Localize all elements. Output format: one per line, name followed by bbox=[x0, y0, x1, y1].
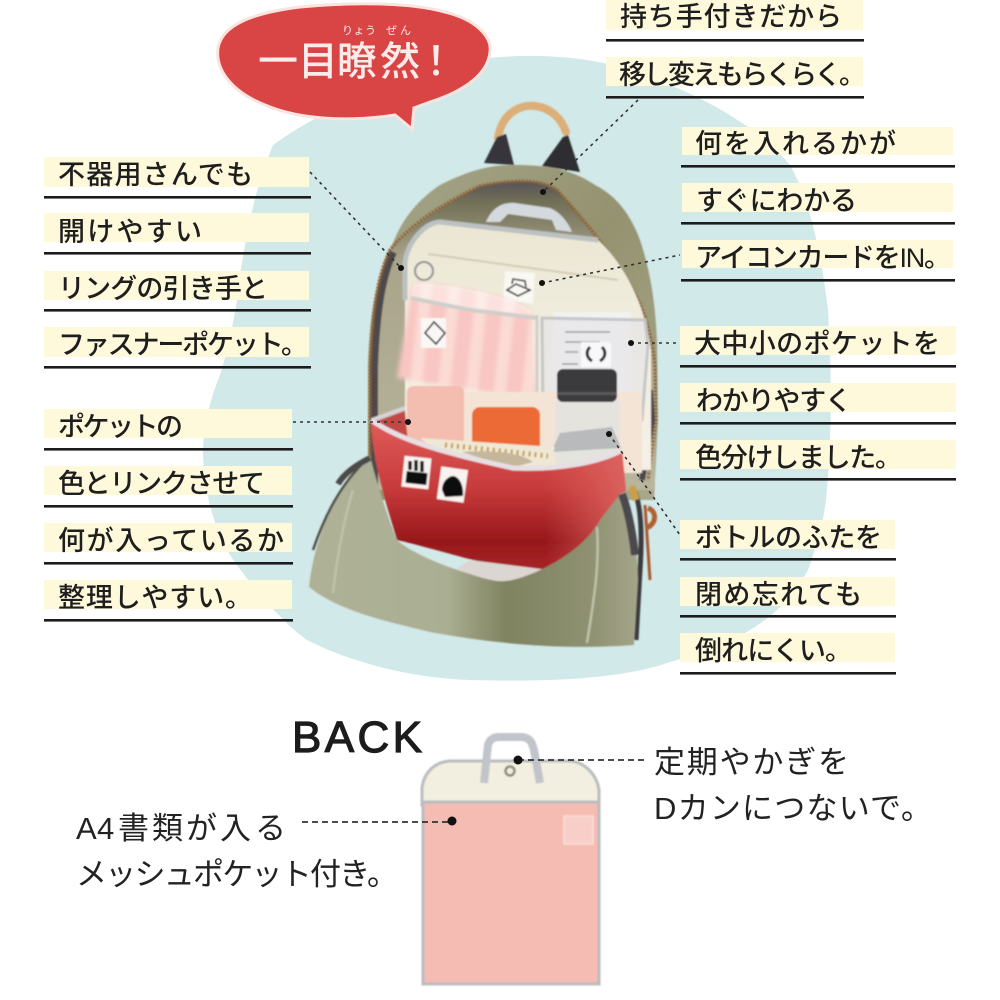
leader: icon card bbox=[539, 255, 680, 286]
callout: linked colours: 何が入っているか bbox=[58, 526, 284, 556]
callout: colour-coded pockets: 色分けしました。 bbox=[695, 443, 902, 473]
medium pocket: grey bbox=[542, 312, 648, 422]
right zipper and tassel bbox=[632, 486, 655, 640]
small pocket: pink stripes bbox=[397, 283, 537, 396]
flap seams bbox=[333, 490, 598, 643]
bubble heading: 一目瞭然！ bbox=[258, 40, 456, 84]
shadow under pocket bbox=[440, 560, 565, 600]
callout: icon card bbox=[681, 127, 955, 282]
ruby: りょう: りょう bbox=[342, 24, 376, 37]
back rim of red pocket bbox=[372, 408, 405, 420]
flap edge band bbox=[313, 458, 368, 550]
callout: ring pull: 開けやすい bbox=[58, 217, 202, 247]
callout: bottle: ボトルのふたを bbox=[695, 523, 882, 553]
callout: ring pull bbox=[44, 157, 311, 369]
callout: colour-coded pockets bbox=[680, 326, 956, 481]
callout: colour-coded pockets: 大中小のポケットを bbox=[694, 329, 940, 359]
callout: icon card: すぐにわかる bbox=[696, 186, 857, 216]
callout: linked colours: ポケットの bbox=[58, 412, 183, 442]
organizer cream panel bbox=[405, 222, 651, 470]
flap right band bbox=[622, 494, 635, 555]
callout: bottle: 倒れにくい。 bbox=[695, 636, 852, 666]
icon card: tissue bbox=[503, 271, 535, 303]
background blob bbox=[203, 56, 831, 681]
text: D-ring note: Dカンにつないで。 bbox=[654, 791, 932, 826]
callout: bottle bbox=[680, 520, 896, 675]
callout: icon card: 何を入れるかが bbox=[695, 129, 896, 159]
callout: linked colours bbox=[44, 409, 293, 622]
body upper cream bbox=[422, 761, 599, 805]
backpack photo illustration bbox=[309, 106, 658, 647]
leader: handle bbox=[540, 100, 638, 195]
heading: BACK: BACK bbox=[292, 713, 422, 762]
text: mesh pocket note: メッシュポケット付き。 bbox=[76, 857, 398, 892]
organizer back view bbox=[422, 737, 599, 984]
callout: linked colours: 整理しやすい。 bbox=[58, 583, 252, 613]
front flap bbox=[309, 456, 638, 647]
icon card: handkerchief bbox=[421, 318, 446, 348]
leader: mesh pocket bbox=[302, 816, 456, 826]
beige pouch bbox=[462, 451, 533, 468]
icon card: earphones bbox=[581, 342, 611, 367]
icon card: coin purse bbox=[437, 466, 468, 503]
backpack shell bbox=[368, 165, 658, 500]
callout: ring pull: ファスナーポケット。 bbox=[58, 330, 308, 360]
organizer handle bbox=[486, 203, 572, 232]
orange wallet bbox=[472, 407, 540, 455]
icon: zipper ring bbox=[415, 262, 433, 280]
leader: red pocket bbox=[293, 419, 411, 425]
handle bbox=[484, 737, 540, 783]
text: mesh pocket note bbox=[76, 811, 398, 892]
bubble shape bbox=[218, 4, 490, 129]
leader: D-ring bbox=[514, 756, 645, 764]
red pocket bbox=[371, 420, 626, 572]
callout: ring pull: 不器用さんでも bbox=[58, 160, 253, 190]
icon: leather handle bbox=[484, 106, 580, 172]
zip pocket seam bbox=[428, 254, 618, 280]
callout: linked colours: 色とリンクさせて bbox=[58, 469, 265, 499]
text: mesh pocket note: A4書類が入る bbox=[76, 811, 286, 846]
speech bubble: 一目瞭然 bbox=[218, 4, 490, 129]
pink case bbox=[407, 386, 464, 448]
icon card: stationery bbox=[401, 456, 431, 489]
notebook bbox=[420, 438, 555, 470]
text: D-ring note: 定期やかぎを bbox=[654, 745, 849, 780]
bottle bbox=[551, 369, 621, 468]
zipper bbox=[370, 181, 656, 490]
callout: icon card: アイコンカードをIN。 bbox=[695, 243, 951, 273]
callout: colour-coded pockets: わかりやすく bbox=[696, 386, 852, 416]
callout: handle bbox=[606, 0, 866, 99]
ruby: ぜん: ぜん bbox=[386, 24, 411, 37]
backpack lining bbox=[372, 181, 655, 490]
inner lower area bbox=[406, 392, 642, 473]
callout: handle: 持ち手付きだから bbox=[620, 2, 842, 32]
mesh pocket pink bbox=[423, 802, 599, 984]
clear card pocket bbox=[564, 816, 593, 844]
leader: medium pocket bbox=[628, 340, 680, 346]
icon: D-ring bbox=[506, 766, 514, 776]
leader: ring pull bbox=[310, 172, 404, 271]
text: D-ring note bbox=[654, 745, 932, 826]
red pocket rim bbox=[371, 420, 622, 468]
callout: ring pull: リングの引き手と bbox=[58, 274, 268, 304]
callout: handle: 移し変えもらくらく。 bbox=[619, 60, 866, 90]
leader: bottle bbox=[606, 431, 680, 535]
callout: bottle: 閉め忘れても bbox=[695, 580, 862, 610]
